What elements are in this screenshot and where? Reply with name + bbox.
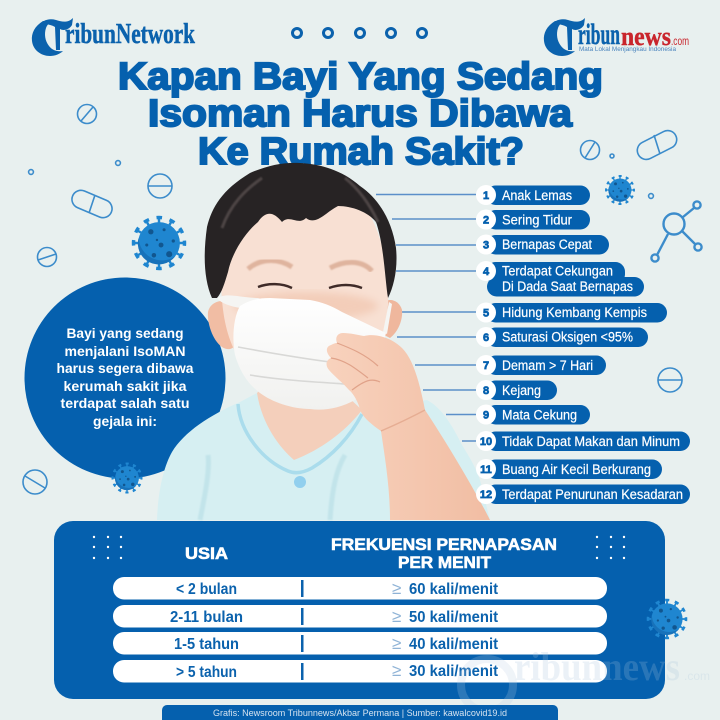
row 1: < 2 bulan: [176, 581, 237, 598]
item 2: [476, 210, 590, 230]
item 11: Buang Air Kecil Berkurang: [502, 462, 651, 477]
item 8: 8: [483, 385, 489, 397]
watermark: .com: [684, 669, 710, 683]
leader lines: [376, 194, 476, 441]
title: Isoman Harus Dibawa: [148, 93, 573, 135]
decorative header dots: [292, 28, 426, 38]
row 3: [113, 632, 607, 654]
title: Kapan Bayi Yang Sedang: [118, 56, 603, 98]
header: frekuensi: PER MENIT: [398, 553, 492, 572]
logo: Tribun Network: [32, 18, 196, 56]
face: [221, 189, 388, 360]
hair highlights: [222, 178, 378, 228]
item 3: 3: [483, 240, 489, 252]
item 9: 9: [483, 410, 489, 422]
table dots right: [596, 536, 625, 559]
logo: Tribunnews: news: [621, 22, 671, 51]
item 2: Sering Tidur: [502, 212, 572, 228]
mask folds: [238, 347, 345, 384]
item 7: 7: [483, 360, 489, 372]
mask: [233, 298, 386, 410]
eyebrows: [248, 260, 372, 271]
mask strap left: [217, 295, 260, 308]
title: Ke Rumah Sakit?: [198, 131, 524, 173]
panel: intro circle: kerumah sakit jika: [64, 378, 187, 394]
item 1: Anak Lemas: [502, 188, 572, 203]
logo: Tribunnews: [544, 18, 689, 56]
shirt collar: [238, 404, 362, 473]
cheek shading: [234, 292, 378, 320]
eyes: [258, 284, 362, 288]
logo: Tribunnews: .com: [671, 34, 689, 48]
panel: breathing frequency table: [54, 521, 665, 699]
item 11: 11: [480, 464, 492, 476]
item 10: [476, 431, 690, 451]
title: [118, 56, 603, 173]
item 3: [476, 234, 609, 254]
row 2: 50 kali/menit: [409, 609, 499, 626]
item 1: 1: [483, 190, 489, 202]
watermark: [461, 644, 710, 711]
watermark: ribunnews: [514, 644, 680, 689]
row 3: ≥: [392, 634, 401, 653]
item 4: Di Dada Saat Bernapas: [502, 279, 633, 294]
item 7: Demam > 7 Hari: [502, 358, 593, 373]
item 4: Terdapat Cekungan: [502, 264, 613, 278]
item 2: 2: [483, 214, 489, 226]
row 2: 2-11 bulan: [170, 609, 243, 626]
hair: [205, 163, 397, 298]
row 3: 40 kali/menit: [409, 636, 499, 653]
header: frekuensi: [331, 535, 557, 572]
item 12: Terdapat Penurunan Kesadaran: [502, 487, 683, 502]
item 10: 10: [480, 436, 492, 448]
item 4: 4: [483, 266, 490, 278]
item 9: [476, 404, 590, 424]
baby shirt: [157, 393, 490, 520]
item 6: [476, 327, 648, 347]
item 12: [476, 484, 690, 504]
row 1: [113, 577, 607, 600]
item 3: Bernapas Cepat: [502, 237, 592, 252]
item 10: Tidak Dapat Makan dan Minum: [502, 434, 680, 449]
logo: Tribunnews: Mata Lokal Menjangkau Indonesia: [579, 46, 676, 53]
item 4: [476, 261, 644, 296]
item 6: Saturasi Oksigen <95%: [502, 330, 633, 344]
item 5: 5: [483, 308, 489, 320]
row 4: [113, 660, 607, 682]
row 4: 30 kali/menit: [409, 663, 499, 680]
shirt button: [294, 476, 306, 488]
icon: virus on circle: [112, 464, 142, 492]
item 8: [476, 380, 557, 400]
item 11: [476, 459, 662, 479]
item 6: 6: [483, 332, 489, 344]
icon: virus top right: [606, 176, 634, 204]
row 4: ≥: [392, 661, 401, 680]
list: symptom pills: [476, 185, 690, 504]
finger lines: [331, 343, 380, 390]
photo: crying baby wearing a mask: [157, 163, 490, 520]
panel: intro circle: terdapat salah satu: [60, 395, 190, 411]
row 4: > 5 tahun: [176, 664, 237, 681]
row 1: 60 kali/menit: [409, 581, 499, 598]
item 5: Hidung Kembang Kempis: [502, 305, 647, 320]
header: usia: USIA: [185, 544, 228, 563]
table dots left: [93, 536, 122, 559]
wrist crease: [381, 410, 425, 431]
icon: virus top left: [134, 218, 184, 268]
item 5: [476, 302, 667, 322]
item 1: [476, 185, 590, 205]
baby neck: [257, 380, 362, 460]
footer credit bar: Grafis: Newsroom Tribunnews/Akbar Permana | Sumber: kawalcovid19.id: [213, 708, 507, 719]
footer credit bar: [162, 705, 558, 720]
row 2: [113, 605, 607, 628]
header: frekuensi: FREKUENSI PERNAPASAN: [331, 535, 557, 554]
row 2: ≥: [392, 607, 401, 626]
item 12: 12: [480, 489, 492, 501]
mask strap right: [383, 302, 392, 334]
item 9: Mata Cekung: [502, 408, 577, 422]
item 7: [476, 355, 606, 375]
left ear: [208, 301, 235, 349]
row 1: ≥: [392, 579, 401, 598]
icon: virus bottom right: [648, 600, 686, 638]
panel: intro circle: [24, 278, 226, 478]
icon: molecule: [651, 201, 702, 262]
panel: intro circle: Bayi yang sedang: [66, 325, 184, 341]
item 8: Kejang: [502, 383, 541, 398]
panel: intro circle: harus segera dibawa: [56, 360, 194, 376]
panel: intro circle: gejala ini:: [93, 413, 157, 429]
icons: medicine outlines: [23, 104, 682, 494]
shirt shading: [200, 455, 345, 520]
hand and arm: [327, 333, 490, 520]
row 3: 1-5 tahun: [174, 636, 239, 653]
logo: Tribun Network: ribunNetwork: [65, 18, 196, 50]
right ear: [382, 300, 402, 338]
panel: intro circle: menjalani IsoMAN: [64, 343, 186, 359]
logo: Tribunnews: ribun: [578, 18, 620, 51]
